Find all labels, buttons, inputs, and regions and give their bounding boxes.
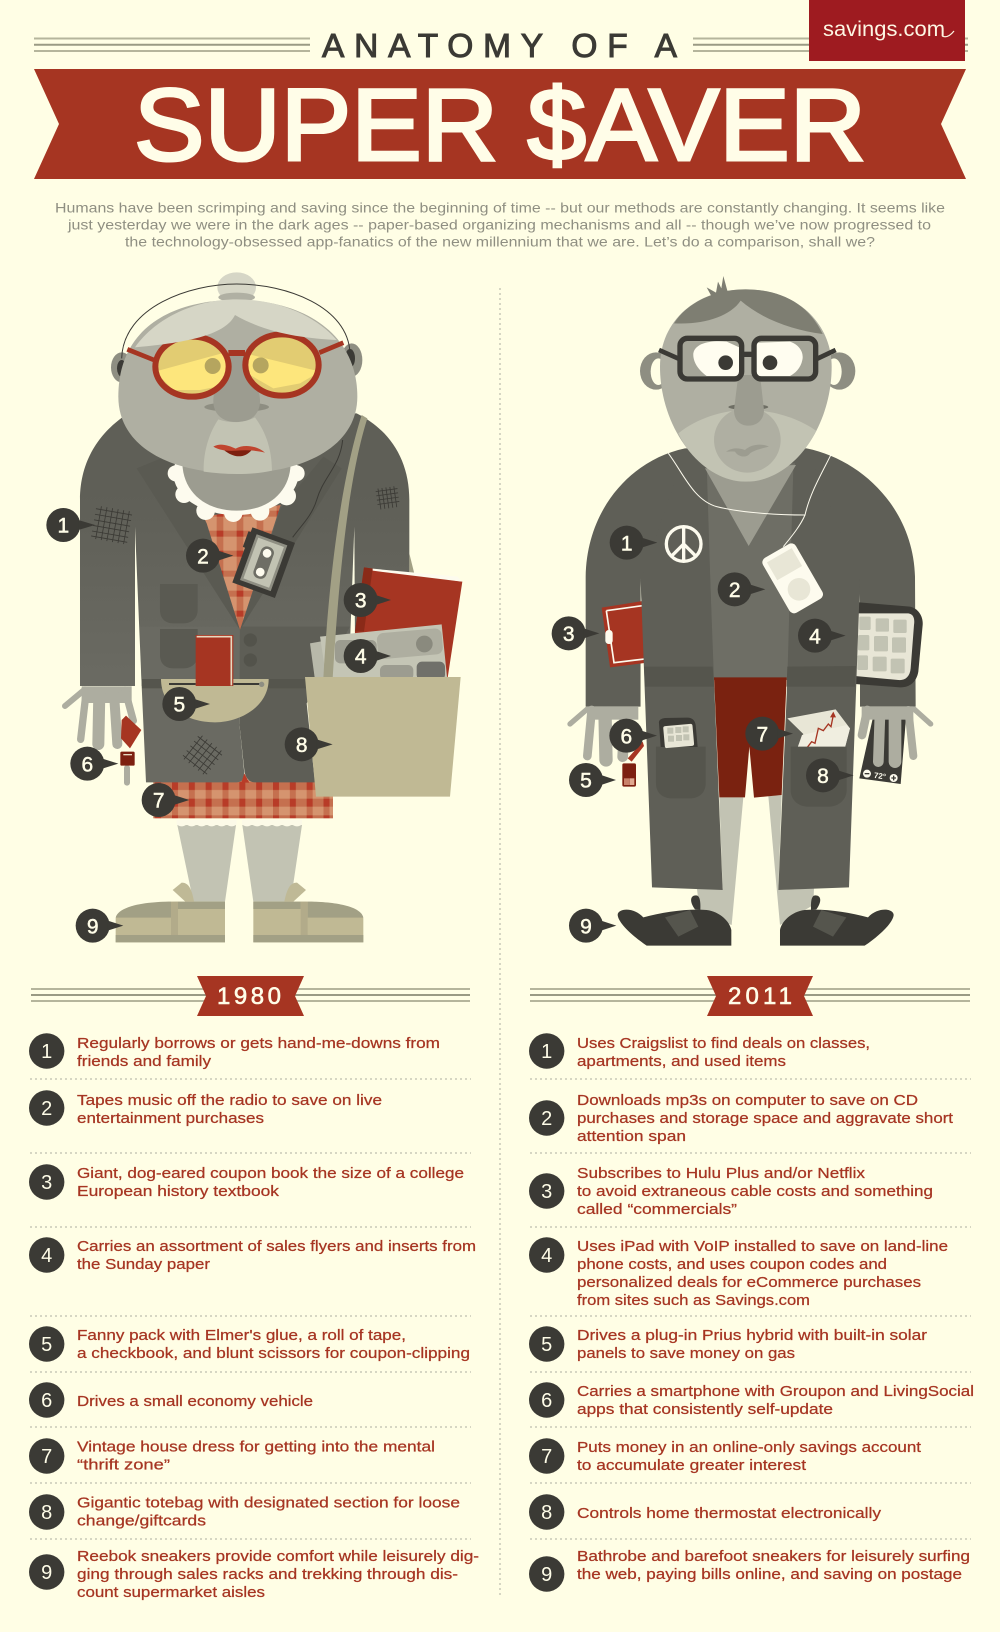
callout 2: 2 (197, 545, 209, 568)
number badges: 1980: 2 (41, 1098, 52, 1120)
ears (111, 343, 362, 382)
item 3: called “commercials” (577, 1201, 737, 1218)
hair (674, 276, 823, 334)
number badges: 2011: 7 (541, 1446, 552, 1468)
number badges: 2011: 2 (541, 1108, 552, 1130)
item 8: change/giftcards (77, 1512, 206, 1530)
jacket patches (91, 486, 400, 776)
left hand (570, 706, 638, 760)
callout 4 (344, 639, 391, 673)
header rule lines (34, 38, 968, 51)
number badges: 2011: 1 (541, 1041, 552, 1063)
number badges: 1980: 1 (41, 1041, 52, 1063)
item 9: ging through sales racks and trekking through dis- (77, 1566, 458, 1583)
callout 5: 5 (580, 770, 592, 793)
callout 8: 8 (817, 765, 829, 788)
headphones band (122, 284, 350, 358)
nose (728, 375, 768, 426)
tote bag (305, 677, 461, 797)
item 2: entertainment purchases (77, 1110, 264, 1127)
item 1: Uses Craigslist to find deals on classes, (577, 1035, 870, 1052)
item 4: the Sunday paper (77, 1256, 210, 1273)
ipod (760, 541, 825, 615)
hand (65, 686, 133, 744)
callout 1 (46, 508, 95, 542)
smartphone in pocket (659, 718, 698, 748)
callout 2: 2 (729, 579, 741, 602)
item 7: “thrift zone” (77, 1456, 170, 1474)
callout 9 (569, 909, 616, 943)
earphone cord (293, 440, 343, 537)
number badges: 1980: 3 (41, 1172, 52, 1194)
item 3: European history textbook (77, 1183, 280, 1200)
number badges: 2011: 4 (541, 1245, 552, 1267)
callout 8 (285, 727, 333, 761)
item 9 (577, 1548, 970, 1583)
car key (120, 716, 141, 786)
item 4: Uses iPad with VoIP installed to save on land-line (577, 1238, 948, 1255)
item 6: Carries a smartphone with Groupon and LivingSocial (577, 1383, 974, 1400)
item 1: apartments, and used items (577, 1053, 786, 1070)
callout 7: 7 (756, 723, 768, 746)
item 9: Bathrobe and barefoot sneakers for leisurely surfing (577, 1548, 970, 1565)
plaid dress neckline (203, 505, 281, 630)
item 2: attention span (577, 1128, 686, 1145)
number badges: 1980: 4 (41, 1245, 52, 1267)
intro paragraph: the technology-obsessed app-fanatics of the new millennium that we are. Let’s do a comparison, shall we? (125, 233, 875, 249)
slip hem lace (177, 820, 302, 826)
savings envelope (787, 709, 850, 747)
callout 5 (162, 687, 210, 721)
1980 heading ribbon: 1980 (217, 983, 281, 1010)
number badges: 2011: 8 (541, 1502, 552, 1524)
number badges: 1980 (29, 1033, 64, 1590)
netflix notebook (602, 601, 647, 667)
item 8: Controls home thermostat electronically (577, 1505, 882, 1522)
callout 4: 4 (809, 625, 821, 648)
callout 8 (806, 758, 854, 792)
callout 9 (76, 909, 123, 943)
illustration: 1980 grandmother (46, 272, 462, 943)
jacket (80, 413, 409, 783)
glasses arms (127, 343, 343, 360)
item 6 (577, 1383, 974, 1418)
number badges: 1980: 5 (41, 1334, 52, 1356)
callout 6: 6 (620, 725, 632, 748)
item 4: personalized deals for eCommerce purchases (577, 1274, 921, 1291)
item 2: Downloads mp3s on computer to save on CD (577, 1092, 918, 1109)
item 9: the web, paying bills online, and saving on postage (577, 1566, 962, 1583)
right pocket (791, 747, 847, 807)
beard (678, 407, 817, 483)
item 8: Gigantic totebag with designated section for loose (77, 1494, 460, 1512)
callout 1 (610, 526, 657, 560)
number badges: 1980: 9 (41, 1562, 52, 1584)
number badges: 2011: 6 (541, 1390, 552, 1412)
1980 heading ribbon (31, 976, 470, 1016)
number badges: 2011: 9 (541, 1564, 552, 1586)
shorts (714, 677, 787, 798)
robe front panels (641, 448, 860, 890)
peace badge (666, 527, 701, 561)
robe sleeves (586, 448, 916, 707)
item 1 (577, 1035, 870, 1070)
item 3: Giant, dog-eared coupon book the size of a college (77, 1165, 464, 1182)
item 7: Vintage house dress for getting into the mental (77, 1438, 435, 1456)
item 5 (77, 1327, 470, 1362)
coupon book (355, 567, 462, 680)
illustration: 2011 man (552, 276, 931, 946)
callout 2 (186, 539, 233, 573)
item 9: count supermarket aisles (77, 1584, 265, 1601)
callout 7 (142, 783, 189, 817)
item 2 (577, 1092, 954, 1145)
item 6: Drives a small economy vehicle (77, 1393, 313, 1410)
item 7: to accumulate greater interest (577, 1457, 807, 1474)
intro paragraph: Humans have been scrimping and saving since the beginning of time -- but our methods are constantly changing. It seems like (55, 200, 945, 216)
socks (177, 825, 302, 902)
callout 8: 8 (296, 734, 308, 757)
item 4 (77, 1238, 476, 1273)
earbud wires (668, 453, 832, 547)
callout 4 (798, 619, 846, 653)
item 3 (77, 1165, 464, 1200)
intro paragraph: just yesterday we were in the dark ages -- paper-based organizing mechanisms and all -- though we’ve now progressed to (67, 216, 931, 232)
list: 1980 (77, 1035, 479, 1601)
face (118, 300, 357, 473)
savings.com logo: savings.com (823, 18, 945, 41)
callout 6: 6 (81, 753, 93, 776)
callout 1: 1 (57, 515, 69, 538)
v-neck (705, 465, 796, 546)
callout 1: 1 (621, 532, 633, 555)
hybrid key (622, 742, 644, 787)
number badges: 1980: 6 (41, 1390, 52, 1412)
item 5: Drives a plug-in Prius hybrid with built-in solar (577, 1327, 927, 1344)
pockets (656, 747, 706, 798)
shoes (116, 883, 363, 942)
item 2: purchases and storage space and aggravate short (577, 1110, 954, 1127)
2011 heading ribbon: 2011 (728, 983, 792, 1010)
plaid dress skirt (153, 780, 333, 818)
glasses lenses (153, 332, 322, 400)
callout 5: 5 (173, 694, 185, 717)
item 7: Puts money in an online-only savings account (577, 1439, 922, 1456)
lips (213, 445, 265, 456)
callout 5 (569, 763, 616, 797)
callout 6 (609, 719, 657, 753)
chin highlight (204, 417, 272, 474)
item 1 (77, 1035, 440, 1070)
sales flyers (310, 624, 447, 680)
lace collar (168, 432, 305, 522)
shirt (707, 463, 795, 680)
item 7 (577, 1439, 922, 1474)
jacket pockets and buttons (160, 584, 257, 668)
cassette walkman (230, 527, 295, 598)
heading: anatomy of a: ANATOMY OF A (322, 28, 678, 65)
callout 2 (718, 572, 765, 606)
number badges: 1980: 7 (41, 1446, 52, 1468)
legs (697, 795, 814, 925)
item 5: a checkbook, and blunt scissors for coupon-clipping (77, 1345, 470, 1362)
ipad (855, 602, 923, 687)
item 4: Carries an assortment of sales flyers and inserts from (77, 1238, 476, 1255)
item 8 (77, 1494, 460, 1530)
thermostat remote (859, 708, 907, 784)
item 4: from sites such as Savings.com (577, 1292, 810, 1309)
callout 6 (70, 747, 118, 781)
nose (204, 353, 269, 422)
callout 7 (745, 717, 793, 751)
item 5 (577, 1327, 927, 1362)
item 3 (577, 1165, 933, 1218)
item 2 (77, 1092, 382, 1127)
callout 9: 9 (87, 915, 99, 938)
item 5: panels to save money on gas (577, 1345, 795, 1362)
number badges: 2011: 5 (541, 1334, 552, 1356)
number badges: 2011: 3 (541, 1181, 552, 1203)
number badges: 1980: 8 (41, 1502, 52, 1524)
tote bag strap (323, 415, 367, 678)
2011 heading ribbon (530, 976, 970, 1016)
item 1: friends and family (77, 1053, 212, 1070)
list: 2011 (577, 1035, 974, 1583)
title banner: SUPER $AVER (134, 68, 866, 182)
hair bun (217, 272, 256, 302)
callout 7: 7 (153, 790, 165, 813)
intro paragraph (55, 200, 945, 249)
thermostat remote: 72° (873, 771, 887, 781)
item 2: Tapes music off the radio to save on live (77, 1092, 382, 1109)
right hand (862, 706, 931, 762)
item 6: apps that consistently self-update (577, 1401, 833, 1418)
callout 3: 3 (563, 623, 575, 646)
head (660, 289, 832, 482)
callout 9: 9 (580, 915, 592, 938)
callout 4: 4 (355, 646, 367, 669)
ears (640, 352, 855, 390)
item 7 (77, 1438, 435, 1474)
shoes (618, 895, 894, 946)
item 4 (577, 1238, 948, 1309)
jacket lapels (137, 453, 342, 630)
item 9: Reebok sneakers provide comfort while leisurely dig- (77, 1548, 479, 1565)
item 9 (77, 1548, 479, 1601)
item 3: to avoid extraneous cable costs and something (577, 1183, 933, 1200)
mouth (726, 445, 769, 457)
number badges: 2011 (529, 1033, 564, 1592)
callout 3 (344, 583, 391, 617)
glasses (659, 338, 836, 379)
item 3: Subscribes to Hulu Plus and/or Netflix (577, 1165, 866, 1182)
item 5: Fanny pack with Elmer's glue, a roll of tape, (77, 1327, 406, 1344)
savings.com logo (809, 0, 965, 61)
callout 3: 3 (355, 590, 366, 613)
item 4: phone costs, and uses coupon codes and (577, 1256, 887, 1273)
robe belt (644, 666, 856, 687)
hair (135, 299, 337, 347)
callout 3 (552, 616, 599, 650)
fanny pack (161, 635, 269, 722)
item 1: Regularly borrows or gets hand-me-downs from (77, 1035, 440, 1052)
